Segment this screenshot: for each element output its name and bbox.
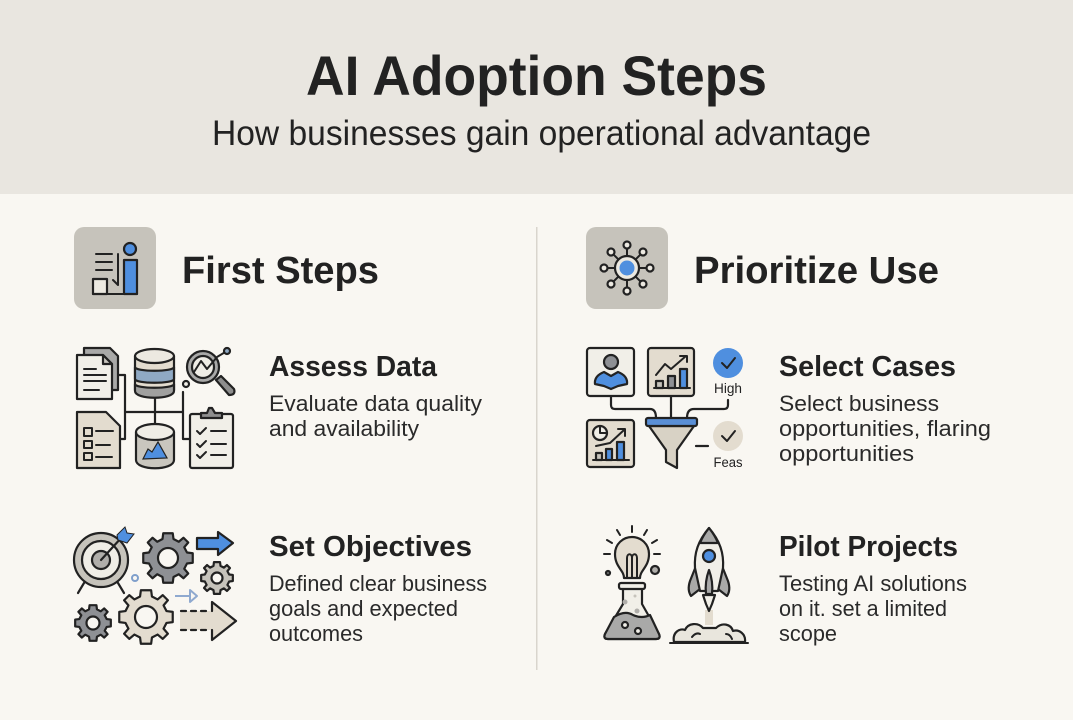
icon: data assessment diagram — [77, 348, 234, 468]
header band — [0, 0, 1073, 194]
icon: hub network tile — [586, 227, 668, 309]
icon: selection funnel diagram: High — [714, 381, 742, 396]
icon: first steps chart tile — [74, 227, 156, 309]
text: set objectives description: outcomes — [269, 621, 363, 646]
icon: selection funnel diagram — [587, 348, 743, 470]
label: select cases: Select Cases — [779, 351, 956, 383]
item: pilot projects — [604, 526, 967, 646]
title: AI Adoption Steps — [306, 44, 767, 107]
text: pilot projects description — [779, 571, 967, 646]
label: assess data: Assess Data — [269, 351, 438, 383]
text: pilot projects description: on it. set a limited — [779, 596, 947, 621]
text: select cases description — [779, 391, 991, 466]
text: assess data description — [269, 391, 482, 441]
subtitle: How businesses gain operational advantage — [212, 114, 871, 153]
text: set objectives description — [269, 571, 487, 646]
text: assess data description: and availability — [269, 416, 419, 441]
text: set objectives description: Defined clear business — [269, 571, 487, 596]
label: pilot projects: Pilot Projects — [779, 531, 958, 563]
item: set objectives — [74, 527, 487, 646]
icon: target, gears and arrows — [74, 527, 236, 644]
item: select cases — [587, 348, 991, 470]
text: assess data description: Evaluate data quality — [269, 391, 482, 416]
text: select cases description: Select business — [779, 391, 939, 416]
item: assess data — [77, 348, 482, 468]
heading: first steps: First Steps — [182, 250, 379, 292]
label: set objectives: Set Objectives — [269, 531, 472, 563]
text: select cases description: opportunities, flaring — [779, 416, 991, 441]
text: pilot projects description: scope — [779, 621, 837, 646]
text: set objectives description: goals and expected — [269, 596, 458, 621]
text: select cases description: opportunities — [779, 441, 914, 466]
icon: selection funnel diagram: Feas — [714, 455, 743, 470]
text: pilot projects description: Testing AI solutions — [779, 571, 967, 596]
panel: first steps — [74, 227, 487, 646]
heading: prioritize use: Prioritize Use — [694, 250, 939, 292]
panel: prioritize use — [586, 227, 991, 646]
icon: light bulb, flask and rocket — [604, 526, 748, 643]
